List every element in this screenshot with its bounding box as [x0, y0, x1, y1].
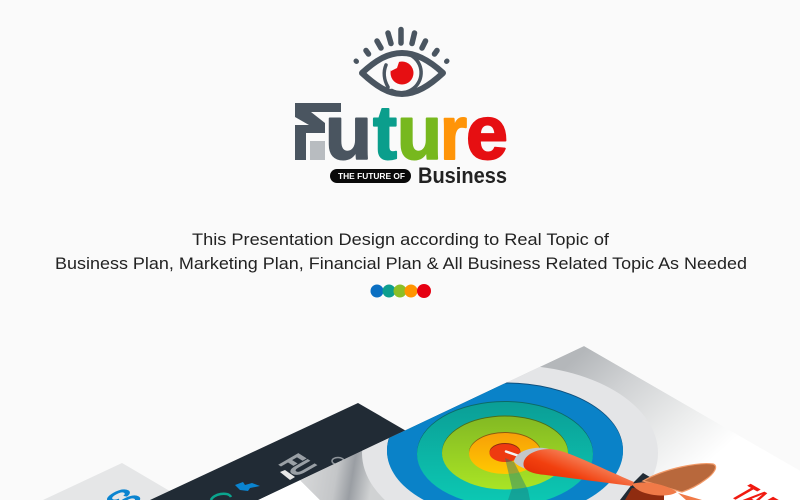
icon: teal globe on dark slide	[211, 494, 231, 500]
dart upper flight	[643, 464, 716, 492]
panel: dark slide	[150, 403, 420, 500]
target: red bullseye	[490, 443, 520, 462]
dart body	[524, 449, 634, 486]
dart shadow	[505, 458, 530, 500]
description text: Business Plan, Marketing Plan, Financial Plan & All Business Related Topic As Needed	[55, 254, 747, 273]
logo: wordmark letters: u	[325, 91, 372, 176]
panel: target slide	[258, 346, 706, 500]
target: orange ring	[469, 432, 541, 474]
dark slide logo	[278, 453, 318, 480]
logo: wordmark letters	[325, 91, 508, 176]
target: light outer ring	[362, 365, 658, 500]
dart needle	[506, 452, 522, 457]
target: blue ring	[387, 382, 623, 500]
dart collar	[514, 448, 549, 469]
target: green ring	[442, 416, 568, 490]
description text: This Presentation Design according to Real Topic of	[192, 230, 609, 249]
dart lower flight	[632, 482, 702, 500]
logo: tagline pill: THE FUTURE OF	[338, 172, 405, 181]
dart	[506, 448, 716, 500]
dart dark flight shadow	[625, 488, 664, 500]
dark slide logo: FU	[272, 449, 324, 480]
logo: wordmark letters: e	[466, 91, 508, 176]
description text	[55, 230, 747, 273]
dark corner behind dart fin	[620, 473, 650, 500]
icon: blue figure on dark slide	[235, 482, 260, 491]
logo: Business word: Business	[418, 163, 507, 188]
logo: stylised F mark	[295, 103, 341, 160]
icon: small eye on dark slide	[332, 458, 344, 464]
logo: tagline pill	[330, 169, 411, 183]
logo: wordmark letters: r	[440, 91, 467, 176]
target: teal ring	[417, 401, 593, 500]
logo: wordmark letters: t	[373, 91, 397, 176]
logo: wordmark letters: u	[397, 91, 442, 176]
panel: left grey slide	[44, 463, 170, 500]
colour dots	[370, 284, 431, 298]
logo: eye icon	[356, 30, 447, 94]
